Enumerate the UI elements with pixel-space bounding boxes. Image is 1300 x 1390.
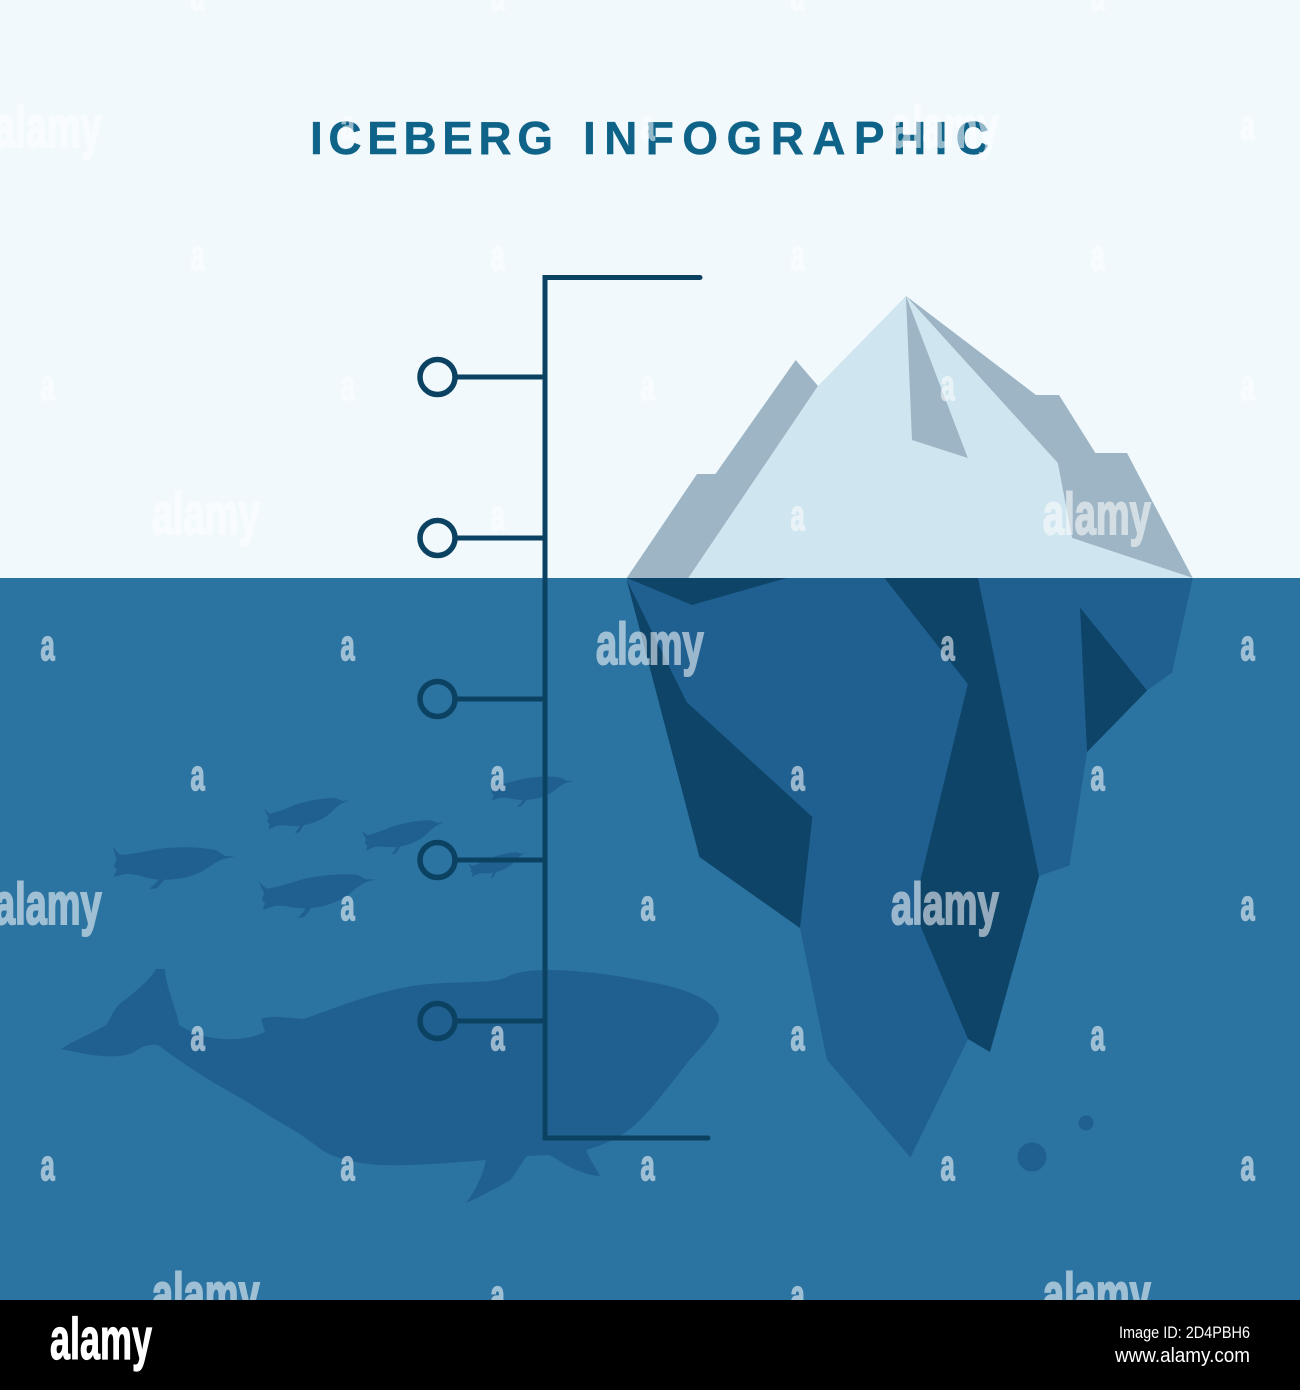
- title: [310, 112, 989, 164]
- penguin 1: [113, 847, 235, 889]
- title: INFOGRAPHIC: [583, 112, 989, 164]
- whale silhouette: [61, 969, 719, 1203]
- small bubble: [1078, 1116, 1094, 1130]
- footer logo: alamy: [50, 1307, 152, 1372]
- watermarks: aaaa: [190, 750, 1105, 800]
- right dark facet: [1080, 608, 1147, 752]
- footer bar: [0, 1300, 1300, 1390]
- top left dark facet: [627, 578, 786, 605]
- watermarks: aaaa: [40, 620, 1255, 670]
- watermarks: aaa: [341, 100, 1255, 150]
- main ice face: [688, 296, 1193, 578]
- title: ICEBERG: [310, 112, 553, 164]
- website: www.alamy.com: [1114, 1345, 1250, 1367]
- watermarks: alamy: [152, 1263, 260, 1327]
- sea background: [0, 578, 1300, 1300]
- penguin 2: [264, 793, 353, 838]
- back right ice facet: [906, 296, 1193, 578]
- bubbles: [1018, 1116, 1094, 1172]
- timeline bracket with markers: [420, 278, 708, 1138]
- marker 5: [420, 1004, 545, 1038]
- marker 2: [420, 520, 545, 556]
- penguin 4: [259, 870, 379, 922]
- marker 1: [420, 360, 545, 394]
- image id: Image ID: 2D4PBH6: [1119, 1323, 1250, 1342]
- bracket: [545, 278, 708, 1138]
- large bubble: [1018, 1142, 1046, 1172]
- penguins: [113, 774, 575, 922]
- penguin 6: [468, 848, 530, 883]
- back left ice facet: [627, 360, 818, 578]
- watermarks: aaaa: [190, 230, 1105, 280]
- watermarks: aaaa: [190, 1010, 1105, 1060]
- sky background: [0, 0, 1300, 578]
- iceberg above water: [627, 296, 1193, 578]
- watermarks: alamy: [152, 483, 260, 547]
- watermarks: aaaaa: [40, 1140, 1255, 1190]
- central shadow facet: [906, 296, 968, 458]
- watermarks: alamy: [1043, 1263, 1151, 1327]
- iceberg below water: [627, 578, 1193, 1158]
- watermarks: aaaaa: [40, 360, 1255, 410]
- submerged mass: [627, 578, 1193, 1158]
- marker 3: [420, 682, 545, 716]
- left dark facet: [627, 580, 812, 928]
- marker 4: [420, 842, 545, 878]
- penguin 5: [490, 774, 575, 808]
- central dark facet: [884, 578, 1039, 1052]
- watermarks: alamy: [891, 873, 999, 937]
- penguin 3: [362, 816, 448, 859]
- watermarks: alamy: [1043, 483, 1151, 547]
- watermarks: alamy: [596, 613, 704, 677]
- watermarks: aa: [491, 490, 805, 540]
- watermarks: alamy: [891, 96, 999, 160]
- watermarks: aaa: [341, 880, 1255, 930]
- watermarks: aa: [491, 1270, 805, 1320]
